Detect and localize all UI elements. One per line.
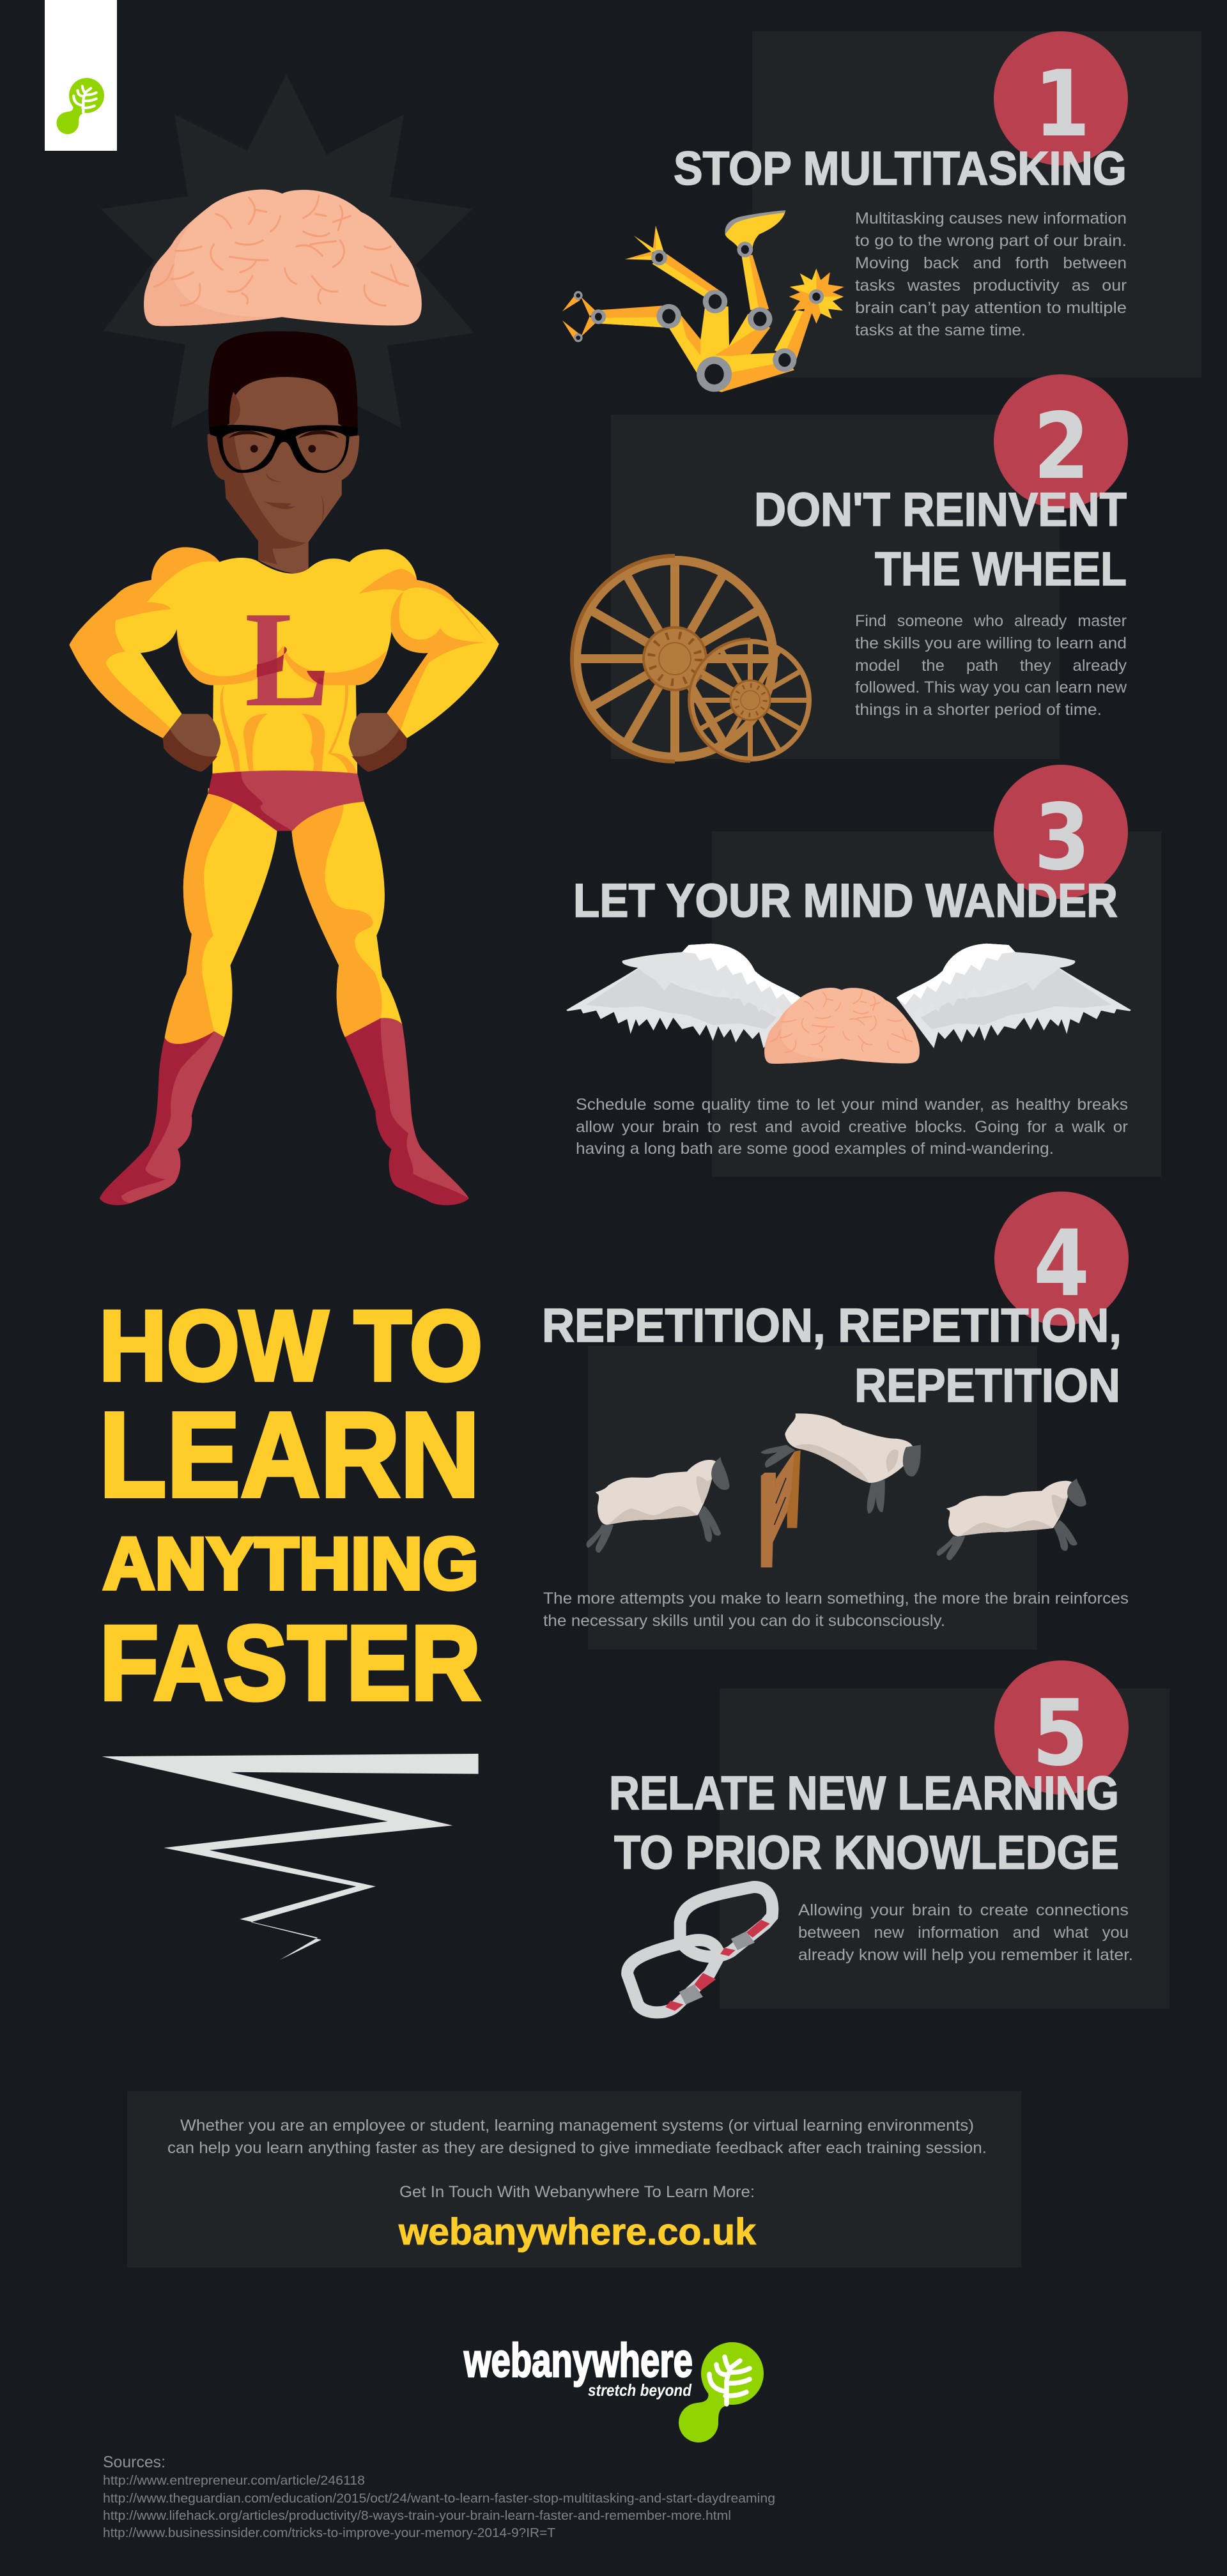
title: how to learn anything faster: ANYTHING (103, 1523, 479, 1605)
glasses and facial features (208, 392, 358, 564)
title: how to learn anything faster (99, 1291, 482, 1722)
body text step 4: the necessary skills until you can do it subconsciously. (543, 1612, 945, 1630)
number badge 1: 1 (1034, 50, 1090, 157)
right wing (897, 944, 1131, 1048)
fence (761, 1450, 801, 1567)
body text step 1: Moving back and forth between (855, 254, 1127, 272)
heading step 3: LET YOUR MIND WANDER (573, 874, 1118, 927)
number badge 4: 4 (1033, 1210, 1090, 1317)
body text step 1: tasks wastes productivity as our (855, 277, 1127, 295)
small brain (764, 988, 920, 1064)
sources: http://www.theguardian.com/education/2015/oct/24/want-to-learn-faster-stop-multitasking-and-start-daydreaming (103, 2492, 775, 2506)
body text step 2: the skills you are willing to learn and (855, 634, 1127, 652)
body text step 5 (798, 1901, 1133, 1964)
panel: step 3 background (712, 831, 1161, 1177)
logo icon (679, 2342, 764, 2442)
website link: webanywhere.co.uk (398, 2211, 757, 2253)
small wheel (689, 639, 809, 762)
body text step 5: Allowing your brain to create connections (798, 1901, 1129, 1919)
starburst behind the brain (101, 74, 474, 460)
body text step 5: between new information and what you (798, 1924, 1129, 1942)
sources: http://www.entrepreneur.com/article/246118 (103, 2474, 365, 2488)
number badge 2 (994, 374, 1128, 509)
icon: sheep jumping a fence (586, 1413, 1086, 1567)
icon: interlocked carabiners (628, 1887, 773, 2012)
sources: Sources: (103, 2453, 166, 2471)
body text step 3: Schedule some quality time to let your mind wander, as healthy breaks (576, 1096, 1128, 1114)
logo tab: white box with leaf icon (45, 0, 117, 151)
sources: http://www.lifehack.org/articles/productivity/8-ways-train-your-brain-learn-faster-and-remember-more.html (103, 2509, 731, 2523)
number badge 4 (994, 1192, 1129, 1326)
body text step 1: to go to the wrong part of our brain. (855, 232, 1127, 250)
body text step 3 (576, 1096, 1128, 1158)
step 2: don't reinvent the wheel (572, 374, 1128, 762)
body text step 4: The more attempts you make to learn something, the more the brain reinforces (543, 1590, 1129, 1607)
body text step 2: things in a shorter period of time. (855, 701, 1102, 719)
lower carabiner (628, 1940, 719, 2012)
panel: step 1 background (752, 31, 1201, 378)
panel: step 4 background (588, 1346, 1037, 1650)
call to action panel (127, 2091, 1021, 2267)
icon: brain with wings (566, 944, 1131, 1064)
call to action text line 2: can help you learn anything faster as they are designed to give immediate feedback after each training session. (167, 2139, 987, 2157)
sheep jumping (760, 1413, 921, 1514)
sheep left (586, 1457, 730, 1552)
left wing (566, 944, 801, 1048)
body text step 2: model the path they already (855, 657, 1127, 675)
heading step 4 (542, 1299, 1122, 1412)
heading step 5 (609, 1767, 1119, 1879)
body text step 1: Multitasking causes new information (855, 210, 1127, 227)
logo tagline: stretch beyond (588, 2380, 692, 2400)
sources: http://www.businessinsider.com/tricks-to-improve-your-memory-2014-9?IR=T (103, 2526, 555, 2540)
heading step 2: DON'T REINVENT (754, 483, 1127, 536)
heading step 2: THE WHEEL (875, 542, 1127, 595)
heading step 5: TO PRIOR KNOWLEDGE (614, 1826, 1119, 1879)
body text step 2 (855, 612, 1127, 719)
body text step 1: tasks at the same time. (855, 321, 1026, 339)
superhero body and legs (69, 547, 499, 1205)
heading step 1: STOP MULTITASKING (674, 142, 1127, 195)
superhero head (208, 332, 359, 573)
step 1: stop multitasking (562, 31, 1128, 392)
large wheel (572, 556, 773, 762)
number badge 3 (994, 765, 1128, 899)
heading step 5: RELATE NEW LEARNING (609, 1767, 1119, 1820)
number badge 5: 5 (1032, 1680, 1088, 1786)
body text step 3: having a long bath are some good examples of mind-wandering. (576, 1140, 1054, 1158)
chest shading over letter (257, 647, 325, 685)
body text step 3: allow your brain to rest and avoid creative blocks. Going for a walk or (576, 1118, 1128, 1136)
icon: wagon wheels (572, 556, 809, 762)
title: how to learn anything faster: LEARN (99, 1388, 480, 1522)
chest letter L: L (245, 583, 329, 735)
panel: step 5 background (720, 1689, 1169, 2009)
body text step 1: brain can’t pay attention to multiple (855, 299, 1127, 317)
upper carabiner (680, 1887, 773, 1957)
lightning bolt (102, 1754, 479, 1960)
sheep right (937, 1478, 1086, 1560)
step 5: relate new learning to prior knowledge (609, 1660, 1133, 2012)
body text step 4 (543, 1590, 1129, 1630)
number badge 3: 3 (1034, 784, 1090, 891)
step 3: let your mind wander (566, 765, 1131, 1158)
step 4: repetition (542, 1192, 1129, 1630)
hair and face (208, 332, 359, 573)
icon: robot arm (562, 210, 844, 392)
number badge 2: 2 (1033, 393, 1090, 500)
title: how to learn anything faster: HOW TO (99, 1291, 482, 1402)
superhero figure (69, 332, 499, 1205)
heading step 4: REPETITION, REPETITION, (542, 1299, 1122, 1352)
heading step 4: REPETITION (854, 1359, 1120, 1412)
heading step 2 (754, 483, 1127, 595)
title: how to learn anything faster: FASTER (100, 1604, 481, 1722)
body text step 5: already know will help you remember it later. (798, 1946, 1133, 1964)
webanywhere logo (463, 2334, 764, 2442)
brain above superhero (144, 190, 422, 326)
logo wordmark: webanywhere (463, 2334, 693, 2387)
body text step 2: followed. This way you can learn new (855, 678, 1127, 696)
sources (103, 2453, 775, 2540)
get in touch line: Get In Touch With Webanywhere To Learn More: (399, 2183, 755, 2201)
number badge 1 (994, 31, 1128, 165)
body text step 2: Find someone who already master (855, 612, 1127, 630)
number badge 5 (994, 1660, 1129, 1795)
panel: step 2 background (611, 415, 1060, 759)
call to action text: Whether you are an employee or student, learning management systems (or virtual learning environments) (180, 2117, 974, 2135)
body text step 1 (855, 210, 1127, 339)
